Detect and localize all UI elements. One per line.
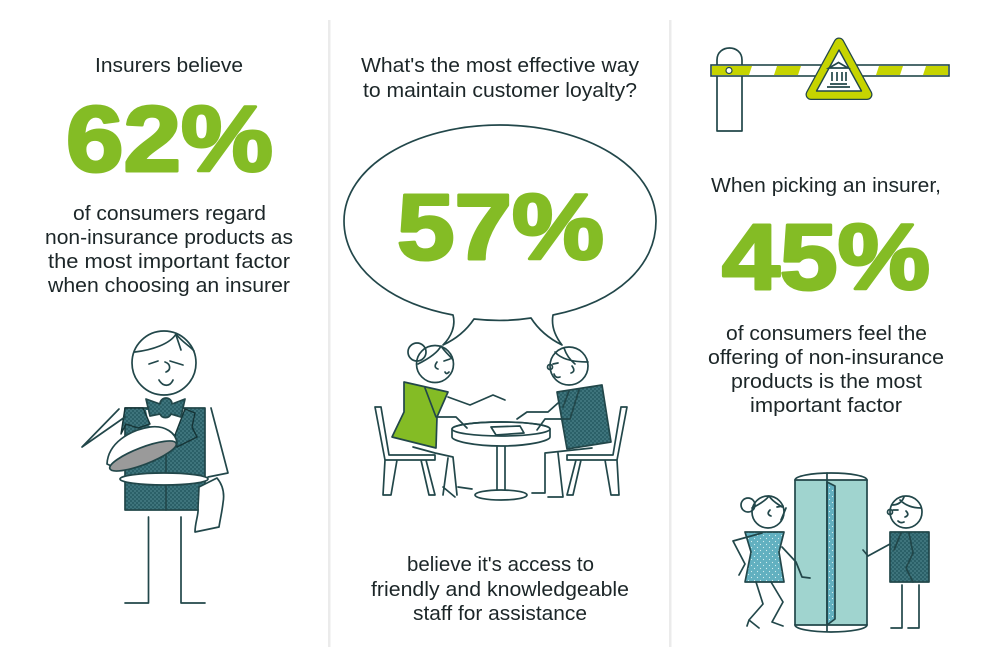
icon: waiter with cloche xyxy=(82,331,228,603)
cloche xyxy=(107,427,179,477)
legs xyxy=(125,517,205,603)
text block: 57% description: friendly and knowledgeable xyxy=(371,578,629,601)
text block: 57% description: staff for assistance xyxy=(413,602,587,625)
woman xyxy=(392,343,505,497)
heading: when picking an insurer: When picking an insurer, xyxy=(711,174,941,197)
text block: 62% description: the most important factor xyxy=(48,250,290,273)
heading: loyalty question: to maintain customer loyalty? xyxy=(363,79,637,102)
serving plate xyxy=(120,473,208,485)
text block: 62% description: non-insurance products as xyxy=(45,226,293,249)
woman xyxy=(733,496,810,628)
stat: 62%: 62% xyxy=(66,87,273,191)
text block: 45% description: of consumers feel the xyxy=(726,322,927,345)
text block: 62% description: of consumers regard xyxy=(73,202,266,225)
table xyxy=(452,422,550,500)
waiter head xyxy=(132,331,196,395)
waiter vest xyxy=(121,408,205,510)
text block: 62% description: when choosing an insurer xyxy=(47,274,290,297)
icon: people at revolving door xyxy=(733,473,929,632)
left arm xyxy=(82,409,125,447)
text block: 57% description xyxy=(371,553,629,625)
heading: loyalty question xyxy=(361,54,640,102)
barrier arm xyxy=(711,65,949,76)
chairs xyxy=(375,407,627,495)
panel: 45% picking an insurer xyxy=(708,43,949,632)
panel: 57% loyalty xyxy=(344,54,656,625)
right arm xyxy=(208,408,228,477)
text block: 45% description xyxy=(708,322,944,417)
warning triangle xyxy=(811,43,867,94)
man xyxy=(863,496,929,628)
heading: loyalty question: What's the most effective way xyxy=(361,54,640,77)
barrier post xyxy=(717,48,742,131)
towel xyxy=(195,478,224,532)
icon: two people at a table xyxy=(375,343,627,500)
heading: insurers believe: Insurers believe xyxy=(95,54,243,77)
speech bubble xyxy=(344,125,656,345)
revolving door xyxy=(795,473,867,632)
man xyxy=(517,347,611,497)
stat: 57%: 57% xyxy=(397,175,604,279)
text block: 45% description: important factor xyxy=(750,394,902,417)
text block: 57% description: believe it's access to xyxy=(407,553,594,576)
bank icon xyxy=(827,62,850,87)
icon: barrier with bank sign xyxy=(711,43,949,131)
bow tie xyxy=(146,398,185,418)
text block: 62% description xyxy=(45,202,293,297)
stat: 45%: 45% xyxy=(722,205,930,309)
text block: 45% description: offering of non-insurance xyxy=(708,346,944,369)
text block: 45% description: products is the most xyxy=(731,370,922,393)
panel: 62% insurers xyxy=(45,54,293,603)
